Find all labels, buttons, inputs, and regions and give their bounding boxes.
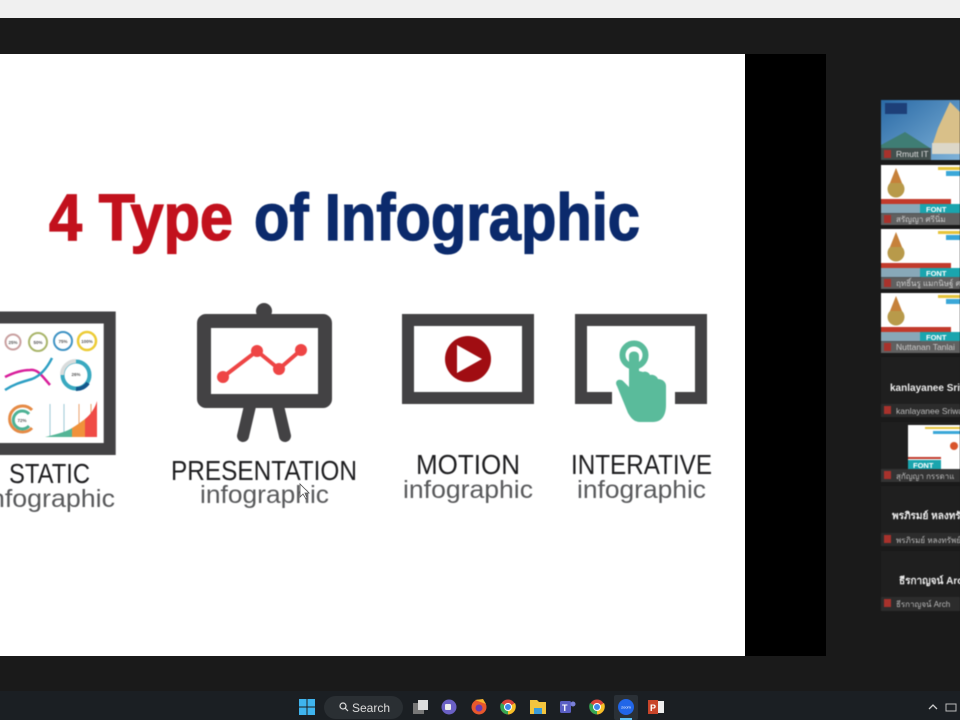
search box: Search: [352, 701, 390, 715]
icon: static infographic dashboard: 100%: [81, 339, 93, 344]
icon: presentation board: [204, 303, 325, 436]
icon: static infographic dashboard: 50%: [33, 340, 43, 345]
label: motion infographic: infographic: [403, 476, 533, 504]
icon: chrome second: [589, 700, 605, 714]
panel: participant slide thumbnail 2: [881, 229, 960, 289]
label: motion infographic: MOTION: [416, 449, 520, 480]
panel: presentation slide: [0, 54, 745, 656]
icon: powerpoint: [648, 700, 664, 714]
icon: motion video screen: [408, 320, 528, 398]
panel: participant pornpirom: พรภิรมย์ หลงทรัพย์: [896, 535, 960, 545]
icon: firefox: [472, 699, 486, 714]
icon: zoom: [614, 695, 638, 720]
icon: interactive touch screen: [581, 320, 701, 422]
icon: chrome: [500, 700, 516, 714]
icon: static infographic dashboard: [0, 318, 110, 449]
label: static infographic: STATIC: [9, 458, 90, 489]
icon: powerpoint: P: [650, 703, 656, 713]
label: interative infographic: [571, 449, 712, 504]
icon: static infographic dashboard: 72%: [17, 418, 27, 423]
icon: zoom: zoom: [621, 704, 632, 710]
label: presentation infographic: infographic: [200, 481, 329, 509]
title: of Infographic: [254, 180, 640, 254]
label: interative infographic: INTERATIVE: [571, 449, 712, 480]
panel: participant sukanya: [881, 422, 960, 482]
icon: static infographic dashboard: 75%: [58, 339, 68, 344]
icon: task view: [413, 700, 428, 714]
panel: participant Nuttanan Tanlai: FONT: [926, 333, 947, 342]
panel: participant sukanya: FONT: [913, 461, 934, 470]
label: presentation infographic: [171, 455, 357, 509]
panel: participant teerakan: ธีรกาญจน์ Arch: [896, 599, 950, 609]
panel: participant Rmutt IT: [881, 100, 960, 160]
panel: windows taskbar: [0, 691, 960, 720]
icon: windows start: [299, 699, 315, 715]
label: static infographic: [0, 458, 115, 513]
panel: participant Nuttanan Tanlai: [881, 293, 960, 353]
icon: meet chat: [442, 700, 456, 714]
panel: participant Rmutt IT: Rmutt IT: [896, 149, 929, 159]
title: 4 Type: [49, 180, 233, 254]
panel: participant slide thumbnail 1: สรัญญา ศรีนิ่ม: [896, 213, 946, 224]
panel: participant Nuttanan Tanlai: Nuttanan Tanlai: [896, 342, 955, 352]
icon: system tray: [929, 704, 956, 711]
label: presentation infographic: PRESENTATION: [171, 455, 357, 486]
panel: participant slide thumbnail 1: FONT: [926, 205, 947, 214]
panel: participant kanlayanee: [881, 357, 960, 417]
icon: static infographic dashboard: 25%: [8, 340, 18, 345]
label: interative infographic: infographic: [577, 476, 706, 504]
panel: participant slide thumbnail 2: FONT: [926, 269, 947, 278]
panel: participant sukanya: สุกัญญา กรรดาแ: [896, 472, 954, 481]
title: [49, 180, 640, 254]
icon: folder: [530, 700, 546, 714]
icon: teams: T: [562, 703, 568, 713]
label: motion infographic: [403, 449, 533, 504]
search box: [324, 696, 403, 719]
panel: participant teerakan: [881, 551, 960, 611]
panel: participant slide thumbnail 1: [881, 165, 960, 225]
panel: participant pornpirom: [881, 486, 960, 546]
icon: mouse cursor: [300, 484, 309, 499]
icon: static infographic dashboard: 26%: [71, 372, 81, 377]
icon: teams: [560, 701, 576, 713]
